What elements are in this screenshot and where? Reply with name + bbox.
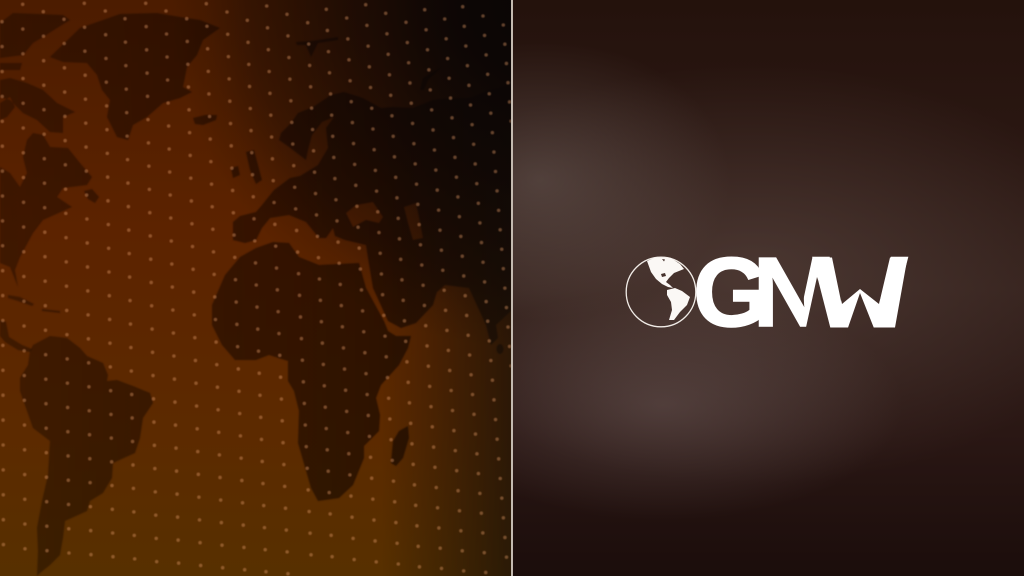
wordmark: G	[693, 237, 769, 347]
dark corner shading	[0, 0, 511, 576]
South America	[20, 336, 153, 576]
divider line	[511, 0, 513, 576]
wordmark: N	[753, 237, 824, 347]
wordmark	[696, 256, 908, 328]
world map landmasses	[0, 12, 511, 576]
Africa	[212, 242, 411, 501]
Ireland and Britain	[231, 150, 262, 184]
panel: world map background	[0, 0, 511, 576]
Eurasia	[233, 85, 511, 345]
dot grid	[0, 1, 511, 576]
Newfoundland	[84, 189, 99, 203]
North America	[0, 133, 92, 287]
Caribbean islands	[8, 295, 60, 313]
panel: logo background	[513, 0, 1024, 576]
Greenland	[50, 13, 220, 140]
wordmark: W	[814, 237, 907, 347]
Central America	[0, 320, 32, 352]
icon: globe	[626, 257, 696, 327]
Madagascar	[391, 426, 409, 466]
Svalbard and Novaya Zemlya	[296, 37, 443, 90]
Iceland	[193, 115, 217, 125]
Sri Lanka	[496, 344, 504, 354]
Arctic Canada	[0, 13, 75, 133]
logo: GNW	[626, 256, 908, 328]
